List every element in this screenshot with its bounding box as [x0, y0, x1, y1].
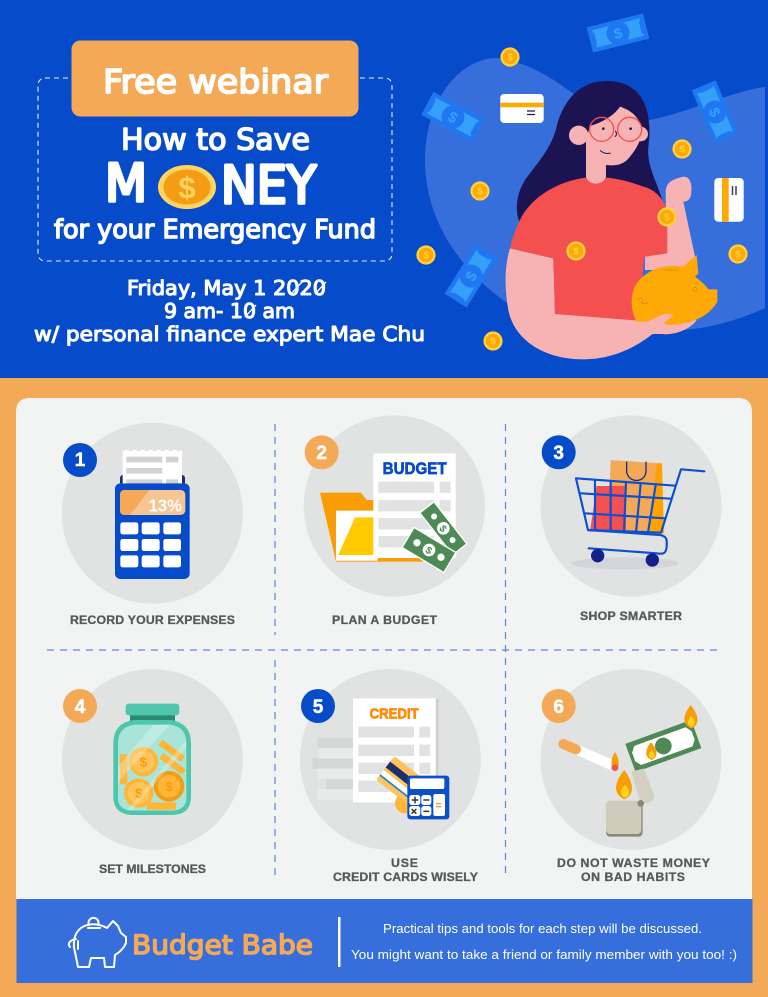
- badge 5: 5: [313, 697, 324, 718]
- title block: [38, 40, 392, 261]
- step 4: set milestones: [62, 669, 243, 876]
- event details: Friday, May 1 2020: [127, 276, 326, 300]
- icon: calculator with receipt: [115, 449, 190, 579]
- icon: floating bills: [421, 13, 738, 307]
- heading: money: [105, 154, 316, 216]
- icon: folder, budget sheet and cash: $: [436, 523, 449, 535]
- icon: floating coins: [416, 47, 748, 351]
- label: ON BAD HABITS: [581, 870, 685, 884]
- panel: steps: [16, 398, 752, 899]
- step 3: shop smarter: [540, 415, 722, 623]
- footer text: Practical tips and tools for each step will be discussed.: [383, 921, 702, 936]
- icon: calculator with receipt: 13%: [149, 496, 182, 516]
- event details: 9 am- 10 am: [164, 299, 295, 323]
- icon: folder, budget sheet and cash: [320, 453, 467, 573]
- badge 6: 6: [553, 697, 564, 718]
- badge 3: [542, 435, 576, 469]
- divider: [338, 917, 340, 967]
- badge: free webinar: Free webinar: [103, 62, 328, 101]
- badge 3: 3: [553, 443, 564, 464]
- event details: [34, 276, 425, 346]
- badge 4: [63, 689, 97, 723]
- label: USE: [391, 856, 418, 870]
- icon: lighter, cigarette and burning bill: [563, 705, 701, 837]
- illustration: woman with piggy bank: [425, 58, 765, 359]
- badge 1: 1: [75, 450, 86, 471]
- badge 1: [63, 443, 97, 477]
- page background: orange border: [0, 378, 768, 997]
- dividers: [47, 424, 721, 877]
- icon: folder, budget sheet and cash: $: [423, 545, 434, 557]
- heading: money: $: [178, 170, 196, 205]
- heading: how to save: How to Save: [121, 122, 310, 156]
- label: CREDIT CARDS WISELY: [333, 870, 478, 884]
- icon: vertical credit card: [714, 178, 744, 222]
- badge 2: 2: [316, 443, 327, 464]
- header background: [0, 0, 768, 378]
- heading: money: M: [105, 154, 147, 214]
- event details: w/ personal finance expert Mae Chu: [34, 322, 425, 346]
- icon: coin jar: $: [140, 754, 148, 769]
- heading: for your emergency fund: for your Emergency Fund: [54, 215, 376, 245]
- label: SET MILESTONES: [99, 862, 206, 876]
- label: SHOP SMARTER: [580, 609, 682, 623]
- icon: coin jar: $: [135, 786, 143, 801]
- step 1: record your expenses: [62, 423, 243, 627]
- badge 2: [305, 435, 339, 469]
- icon: credit sheet, card and calculator: CREDIT: [370, 707, 419, 723]
- icon: credit sheet, card and calculator: [312, 698, 449, 819]
- woman figure: [506, 81, 717, 359]
- step 2: plan a budget: [304, 415, 485, 627]
- step 6: do not waste money on bad habits: [540, 669, 722, 884]
- badge 5: [301, 689, 335, 723]
- icon: horizontal credit card: [500, 94, 544, 123]
- background blob: [425, 58, 765, 330]
- step 5: use credit cards wisely: [300, 669, 481, 884]
- logo text: Budget Babe: [132, 930, 313, 961]
- heading: money: NEY: [221, 156, 316, 216]
- icon: folder, budget sheet and cash: BUDGET: [383, 459, 447, 478]
- label: [333, 856, 478, 884]
- label: PLAN A BUDGET: [332, 613, 437, 627]
- icon: piggy bank outline: [69, 918, 126, 967]
- footer text: You might want to take a friend or family member with you too! :): [351, 947, 737, 962]
- badge 6: [542, 689, 576, 723]
- footer bar: [16, 899, 752, 983]
- label: DO NOT WASTE MONEY: [557, 856, 710, 870]
- label: RECORD YOUR EXPENSES: [70, 613, 235, 627]
- icon: coin jar: $: [165, 779, 173, 794]
- icon: coin jar: [113, 704, 191, 815]
- icon: shopping cart: [571, 460, 704, 569]
- label: [557, 856, 710, 884]
- badge: free webinar: [72, 40, 358, 116]
- footer text: [351, 921, 737, 962]
- badge 4: 4: [75, 697, 86, 718]
